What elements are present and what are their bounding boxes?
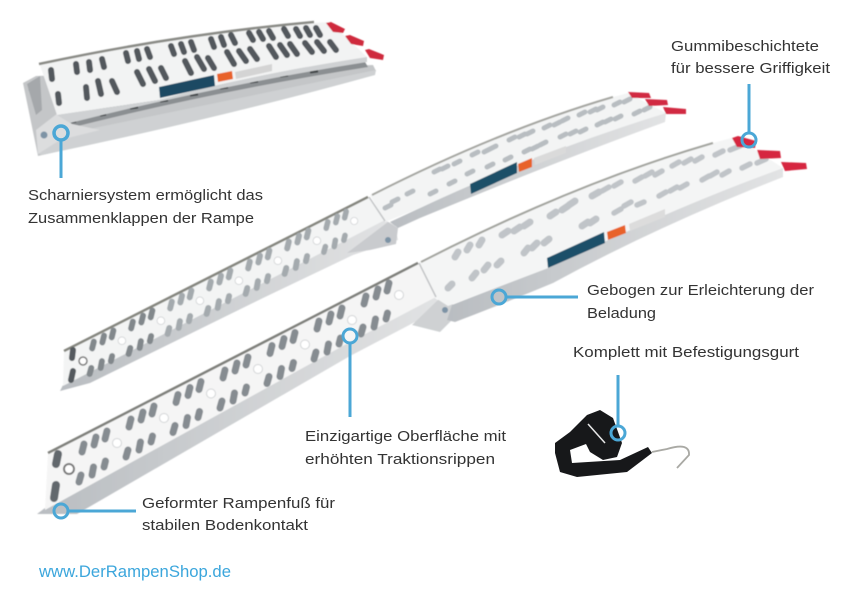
middle ramp: lower deck [63,197,385,386]
front ramp: upper slots [448,192,599,288]
marker ring [54,504,68,518]
folded ramp: slots [51,28,336,103]
marker ring [742,133,756,147]
middle ramp: red handles [628,92,686,114]
label text: Zusammenklappen der Rampe [28,210,254,227]
middle ramp: lower slots [90,311,165,374]
folded ramp: base section [23,65,376,156]
label text: erhöhten Traktionsrippen [305,451,495,468]
callout: surface [305,329,507,468]
middle ramp: upper deck [370,93,666,222]
folded ramp: red handles [326,22,384,60]
marker ring [343,329,357,343]
label text: Gummibeschichtete [671,38,819,55]
strap body [555,410,652,477]
callout: ramp foot [54,495,335,534]
label text: Einzigartige Oberfläche mit [305,428,507,445]
marker ring [54,126,68,140]
label text: Komplett mit Befestigungsgurt [573,344,800,361]
folded ramp: hinge [36,113,100,154]
middle ramp: lower section side [60,219,398,391]
strap with hook [555,410,689,477]
leader line [616,375,620,426]
middle ramp: upper slots [385,99,650,208]
middle ramp: hinge [347,222,398,253]
strap buckle [588,424,605,443]
label text: Beladung [587,305,656,322]
leader line [68,510,136,512]
leader line [348,343,352,417]
callout: strap [573,344,800,440]
label text: Geformter Rampenfuß für [142,495,335,512]
front ramp: upper section side [447,168,783,322]
front ramp: upper deck [419,137,783,306]
folded ramp: label [159,75,215,98]
marker ring [492,290,506,304]
middle ramp: label [470,162,517,194]
front ramp: hinge [412,298,456,332]
front ramp: lower slots [79,283,404,482]
leader line [60,140,62,178]
leader line [506,296,578,298]
front ramp: lower section side [37,296,445,514]
callout: hinge system [28,126,263,227]
label text: Gebogen zur Erleichterung der [587,282,814,299]
front ramp [37,136,807,514]
label text: Scharniersystem ermöglicht das [28,187,263,204]
marker ring [611,426,625,440]
folded ramp [23,22,384,156]
callout: rubber coating [671,38,831,147]
front ramp: lower deck [45,263,436,510]
label text: für bessere Griffigkeit [671,60,831,77]
label text: stabilen Bodenkontakt [142,517,309,534]
callout: curved shape [492,282,814,322]
front ramp: red handles [732,136,807,171]
front ramp: label [547,232,605,268]
middle ramp: upper section side [390,113,666,228]
website url: www.DerRampenShop.de [38,562,231,581]
middle ramp [60,92,686,391]
leader line [748,84,750,133]
metal hook [652,447,689,468]
folded ramp: top deck [40,22,367,115]
